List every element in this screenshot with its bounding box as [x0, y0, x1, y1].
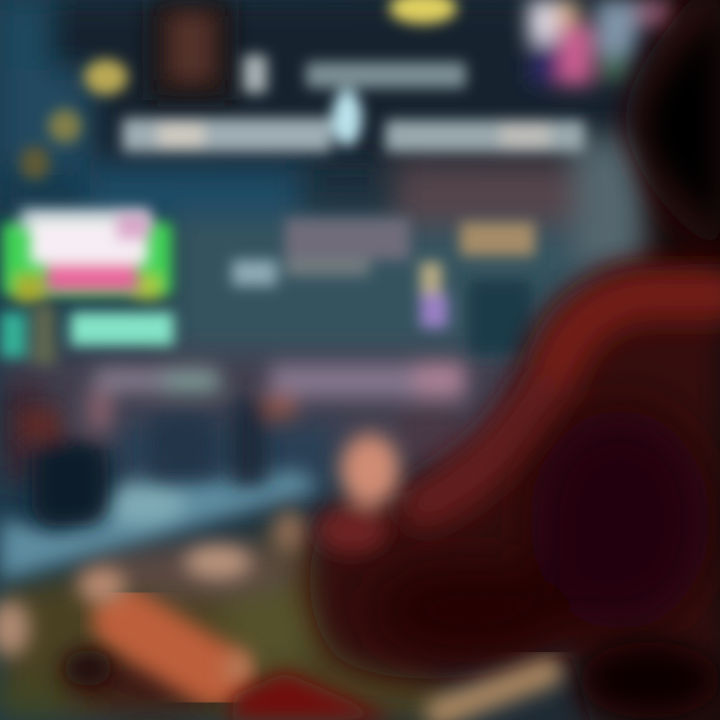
person: head: [625, 0, 720, 255]
dark portrait block: [150, 0, 232, 100]
screen lower edge: [0, 470, 320, 580]
desk highlight: tan streak: [440, 672, 548, 712]
person: raised hand: [316, 434, 400, 554]
hoodie lit rim: [425, 295, 720, 505]
colourful top right block: [528, 0, 671, 85]
yellow coin top: [389, 0, 457, 24]
green and pink card: [0, 208, 174, 365]
screen panel: [0, 0, 660, 500]
desk surface: [0, 530, 450, 720]
middle screen text rows: [232, 218, 535, 355]
sleeve: [230, 672, 395, 720]
top screen graphics: [20, 0, 671, 180]
person: maroon hoodie: [310, 262, 720, 720]
coins left: [20, 59, 128, 180]
person: forearm and lower hand: [64, 567, 395, 720]
desk highlights: [0, 510, 308, 656]
lower screen rows: [20, 362, 465, 526]
heading: illegible blurred title: [122, 55, 585, 152]
teal button: [0, 305, 174, 365]
